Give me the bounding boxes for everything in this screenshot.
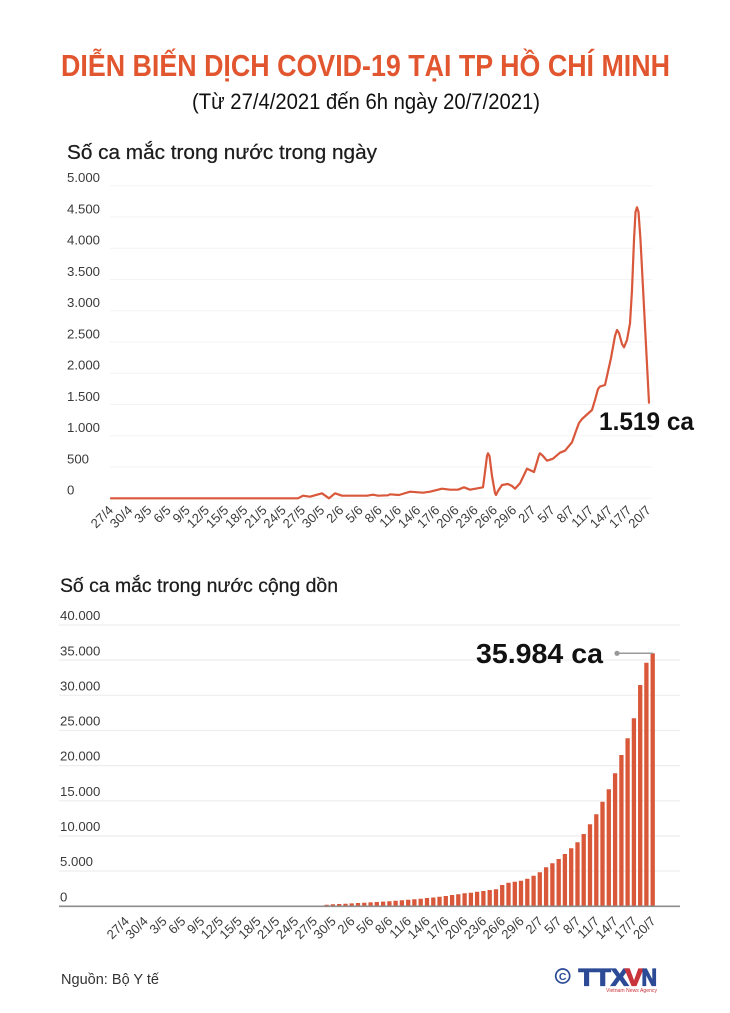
logo: TTXVN xyxy=(556,964,657,994)
x axis labels: cumulative cases: 12/5 xyxy=(198,914,226,942)
x axis labels: cumulative cases: 15/5 xyxy=(216,914,245,942)
x axis labels: cumulative cases: 3/5 xyxy=(146,914,170,937)
x axis labels: daily cases: 24/5 xyxy=(260,503,289,531)
logo tagline: Vietnam News Agency xyxy=(606,988,657,994)
y axis labels: daily cases: 1.000 xyxy=(67,420,100,435)
y axis labels: daily cases xyxy=(67,170,100,498)
x axis labels: daily cases: 9/5 xyxy=(170,503,193,526)
y axis labels: cumulative cases xyxy=(60,608,100,904)
x axis labels: daily cases: 12/5 xyxy=(184,503,212,531)
x axis labels: cumulative cases: 9/5 xyxy=(184,914,207,937)
y axis labels: cumulative cases: 35.000 xyxy=(60,644,100,658)
x axis labels: daily cases: 14/7 xyxy=(587,503,615,531)
x axis labels: daily cases: 8/7 xyxy=(554,503,577,526)
x axis labels: daily cases: 29/6 xyxy=(491,503,519,531)
panel: daily cases line chart xyxy=(67,141,695,531)
x axis labels: daily cases: 15/5 xyxy=(203,503,231,531)
x axis labels: daily cases: 11/6 xyxy=(376,503,404,530)
x axis labels: daily cases: 23/6 xyxy=(452,503,481,531)
baseline axis xyxy=(59,905,680,907)
x axis labels: cumulative cases: 14/6 xyxy=(404,914,433,942)
x axis labels: cumulative cases: 5/6 xyxy=(353,914,377,937)
y axis labels: daily cases: 4.500 xyxy=(67,202,100,216)
icon: copyright mark: C xyxy=(559,971,567,983)
x axis labels: cumulative cases: 8/7 xyxy=(560,914,583,937)
x axis labels: daily cases: 18/5 xyxy=(222,503,251,531)
x axis labels: cumulative cases: 20/7 xyxy=(630,914,659,942)
x axis labels: cumulative cases: 27/5 xyxy=(292,914,320,942)
x axis labels: daily cases: 17/6 xyxy=(414,503,443,531)
y axis labels: cumulative cases: 0 xyxy=(60,890,67,904)
y axis labels: cumulative cases: 5.000 xyxy=(60,854,93,869)
x axis labels: cumulative cases: 30/4 xyxy=(122,914,151,942)
x axis labels: cumulative cases: 24/5 xyxy=(273,914,301,942)
x axis labels: cumulative cases: 26/6 xyxy=(480,914,508,942)
y axis labels: cumulative cases: 30.000 xyxy=(60,678,100,694)
x axis labels: daily cases: 14/6 xyxy=(395,503,423,531)
y axis labels: daily cases: 0 xyxy=(67,482,74,498)
x axis labels: daily cases: 2/6 xyxy=(323,503,347,526)
x axis labels: cumulative cases: 30/5 xyxy=(310,914,339,942)
logo wordmark: TTX xyxy=(578,964,628,992)
y axis labels: daily cases: 1.500 xyxy=(67,389,100,404)
y axis labels: daily cases: 2.500 xyxy=(67,326,100,342)
source note: Nguồn: Bộ Y tế xyxy=(61,972,159,988)
x axis labels: cumulative cases: 23/6 xyxy=(461,914,489,942)
x axis labels: daily cases: 20/6 xyxy=(433,503,462,531)
x axis labels: cumulative cases: 17/6 xyxy=(423,914,452,942)
x axis labels: cumulative cases: 6/5 xyxy=(165,914,189,937)
logo wordmark: N xyxy=(642,964,657,992)
y axis labels: daily cases: 500 xyxy=(67,452,89,466)
y axis labels: daily cases: 3.500 xyxy=(67,264,100,279)
x axis labels: cumulative cases: 11/7 xyxy=(574,914,602,941)
y axis labels: daily cases: 4.000 xyxy=(67,232,100,248)
y axis labels: cumulative cases: 40.000 xyxy=(60,608,100,623)
subtitle: date range: (Từ 27/4/2021 đến 6h ngày 20/7/2021) xyxy=(192,89,540,114)
x axis labels: cumulative cases: 27/4 xyxy=(104,914,132,942)
heading: cumulative cases: Số ca mắc trong nước cộng dồn xyxy=(60,575,338,597)
x axis labels: cumulative cases: 8/6 xyxy=(372,914,395,937)
callout: 1.519 cases: 1.519 ca xyxy=(599,408,695,436)
x axis labels: cumulative cases: 20/6 xyxy=(442,914,471,942)
y axis labels: cumulative cases: 10.000 xyxy=(60,819,100,834)
x axis labels: daily cases: 3/5 xyxy=(131,503,155,526)
x axis labels: cumulative cases: 2/7 xyxy=(522,914,546,937)
x axis labels: cumulative cases: 2/6 xyxy=(334,914,358,937)
x axis labels: daily cases: 21/5 xyxy=(241,503,270,531)
x axis labels: daily cases: 30/4 xyxy=(107,503,135,531)
y axis labels: daily cases: 5.000 xyxy=(67,170,100,185)
x axis labels: daily cases: 17/7 xyxy=(606,503,635,531)
y axis labels: daily cases: 2.000 xyxy=(67,358,100,372)
y axis labels: cumulative cases: 20.000 xyxy=(60,748,100,764)
bars: cumulative cases xyxy=(327,653,653,906)
x axis labels: cumulative cases: 18/5 xyxy=(235,914,264,942)
x axis labels: cumulative cases: 5/7 xyxy=(541,914,565,937)
y axis labels: daily cases: 3.000 xyxy=(67,295,100,310)
panel: cumulative cases bar chart xyxy=(59,575,680,942)
heading: daily cases: Số ca mắc trong nước trong ngày xyxy=(67,141,377,164)
x axis labels: cumulative cases xyxy=(104,914,659,942)
x axis labels: cumulative cases: 29/6 xyxy=(498,914,527,942)
x axis labels: daily cases: 5/6 xyxy=(342,503,366,526)
x axis labels: daily cases: 27/5 xyxy=(280,503,308,531)
logo wordmark: V xyxy=(625,964,643,992)
callout: 35.984 cases: 35.984 ca xyxy=(476,638,603,669)
x axis labels: daily cases: 26/6 xyxy=(472,503,500,531)
x axis labels: daily cases: 27/4 xyxy=(88,503,116,531)
x axis labels: cumulative cases: 21/5 xyxy=(254,914,283,942)
x axis labels: daily cases: 8/6 xyxy=(362,503,385,526)
x axis labels: cumulative cases: 17/7 xyxy=(611,914,640,942)
x axis labels: daily cases: 5/7 xyxy=(534,503,558,526)
y axis labels: cumulative cases: 15.000 xyxy=(60,784,100,799)
x axis labels: daily cases: 30/5 xyxy=(299,503,327,531)
x axis labels: daily cases: 11/7 xyxy=(568,503,596,530)
x axis labels: daily cases xyxy=(88,503,654,531)
y axis labels: cumulative cases: 25.000 xyxy=(60,714,100,728)
logo wordmark xyxy=(578,964,657,992)
x axis labels: daily cases: 2/7 xyxy=(515,503,539,526)
x axis labels: daily cases: 20/7 xyxy=(625,503,654,531)
x axis labels: cumulative cases: 11/6 xyxy=(386,914,414,941)
line series: daily cases xyxy=(111,207,649,498)
x axis labels: daily cases: 6/5 xyxy=(150,503,174,526)
x axis labels: cumulative cases: 14/7 xyxy=(592,914,621,942)
